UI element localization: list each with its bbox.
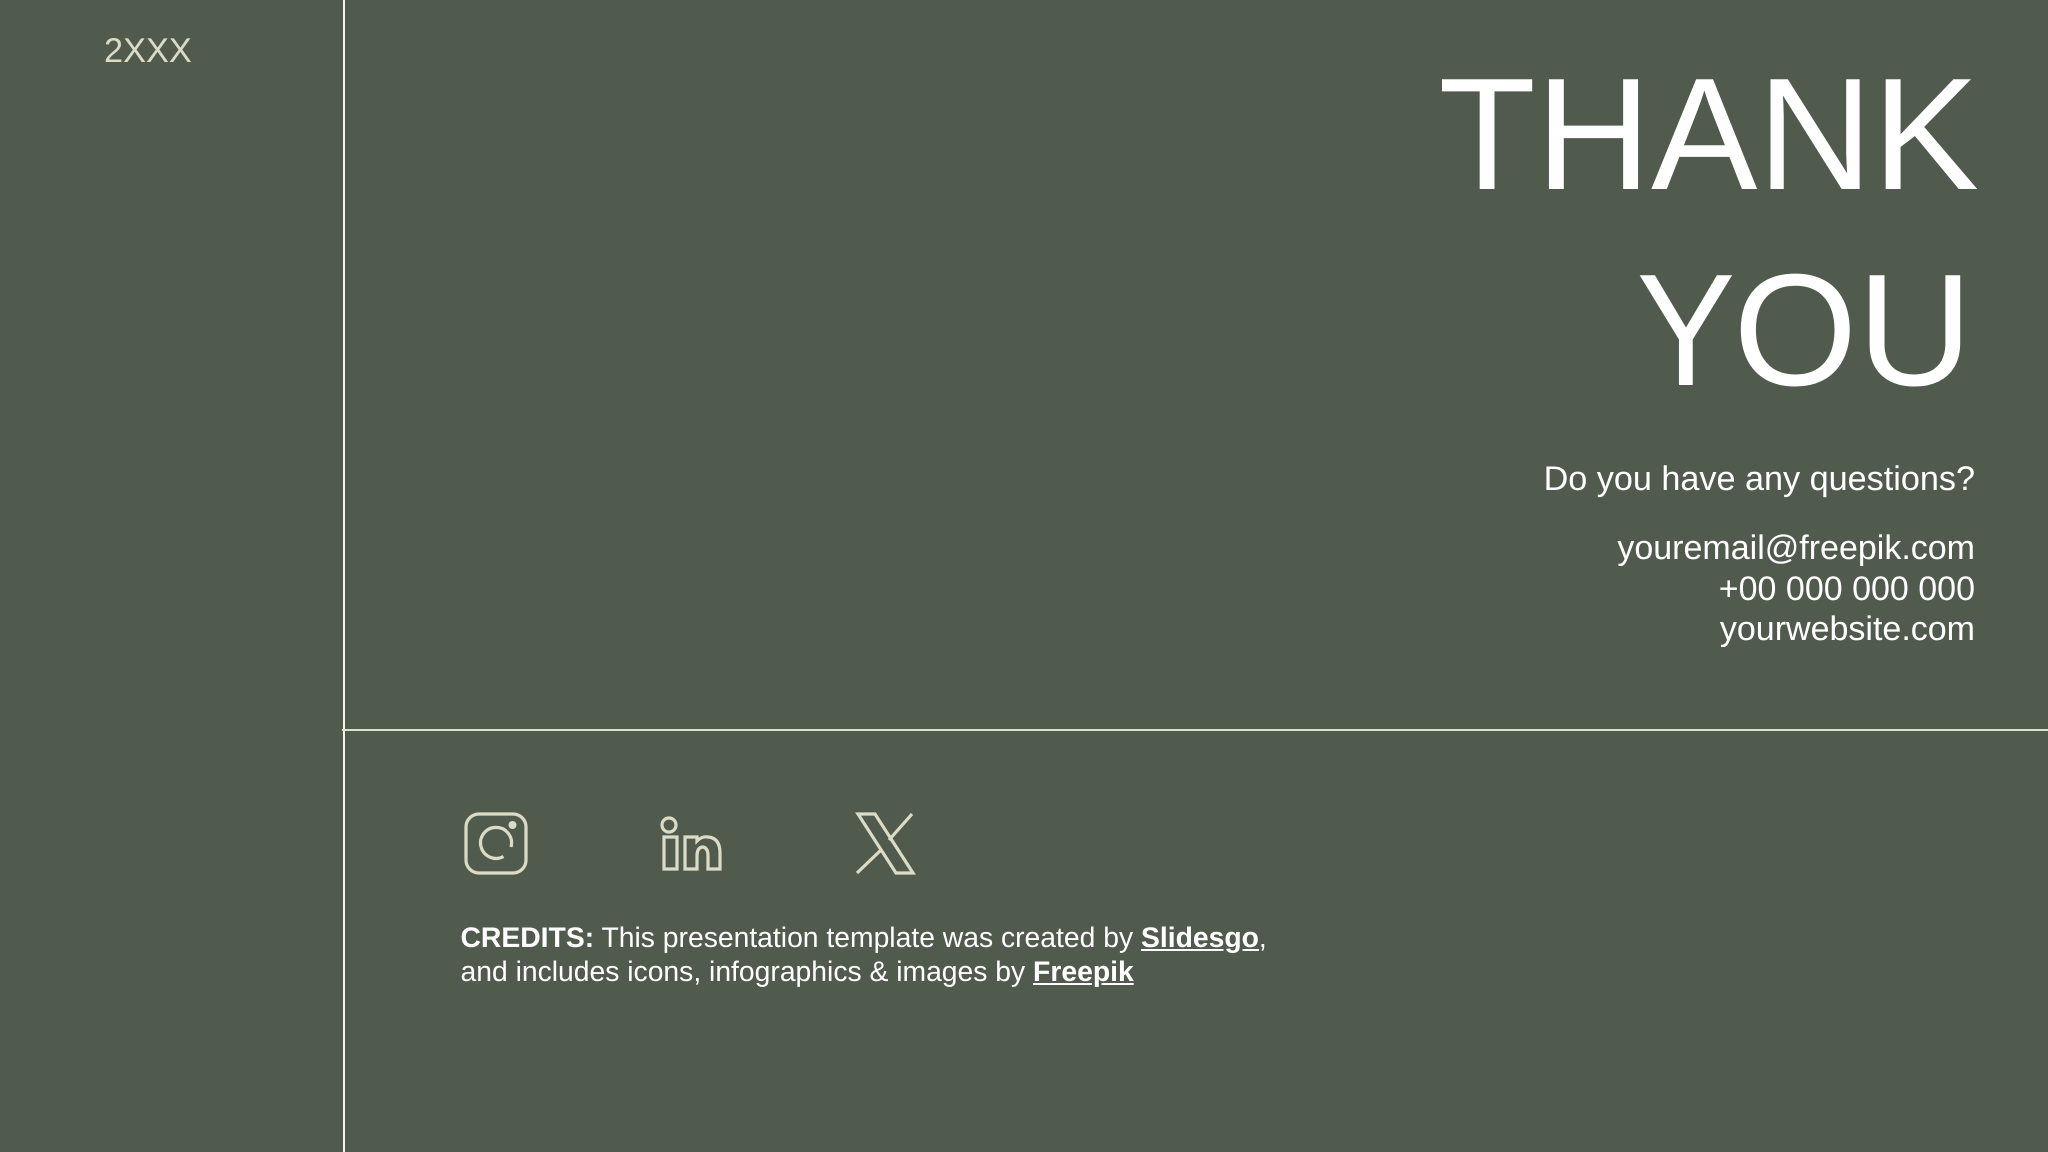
title line: you: Y [1636,241,1735,419]
credits text: CREDITS: This presentation template was created by Slidesgo, [460,920,1267,952]
icon: instagram [466,814,526,873]
contact details: youremail@freepik.com [1617,529,1975,567]
contact details: +00 000 000 000 [1719,570,1975,608]
horizontal rule [342,729,2048,731]
icon: x [857,814,913,873]
question text: Do you have any questions? [1544,460,1975,498]
credits text [460,920,1267,987]
title line: thank: THANK [1438,45,1979,223]
title line: you: OU [1733,241,1972,419]
credits text: and includes icons, infographics & images by Freepik [460,954,1134,986]
icon: linkedin [662,818,720,869]
vertical rule [343,0,345,1152]
contact details: yourwebsite.com [1720,610,1975,648]
title: thank you [1438,45,1979,419]
year label: 2XXX [104,32,192,70]
contact details [1617,529,1975,648]
